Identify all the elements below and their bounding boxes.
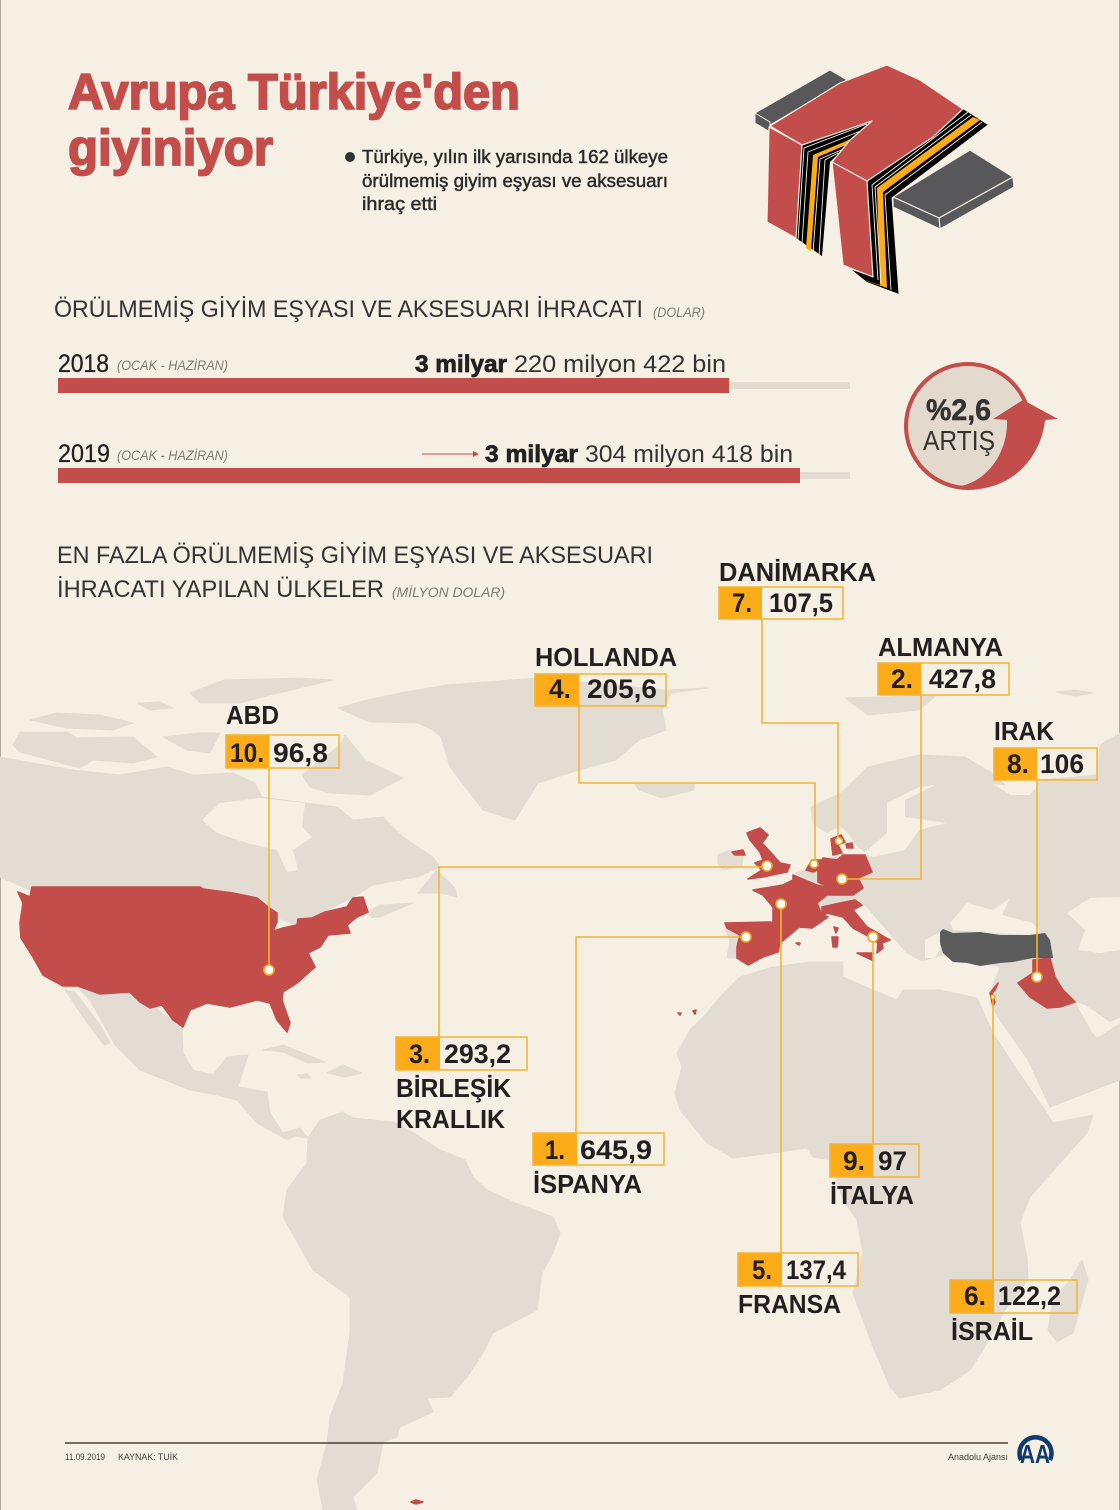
row 2019: (OCAK - HAZİRAN) (117, 447, 228, 463)
highlighted countries (18, 828, 1075, 1504)
country: Balearic (796, 943, 800, 945)
country: Netherlands (806, 860, 823, 872)
row 2019: 304 milyon 418 bin (585, 441, 793, 468)
label: ABD (226, 700, 339, 768)
row 2019: 3 milyar (485, 441, 578, 468)
label: Birleşik Krallık: BİRLEŞİK (396, 1073, 511, 1103)
source: KAYNAK: TUİK (118, 1452, 178, 1462)
label: İtalya: İTALYA (830, 1180, 914, 1210)
label: İsrail: 122,2 (998, 1281, 1061, 1311)
label: Danimarka: 7. (732, 588, 752, 618)
row 2018: 2018 (58, 350, 109, 378)
callout: increase (906, 364, 1058, 489)
country: Sardinia (832, 937, 838, 947)
row 2019 (58, 440, 850, 483)
row 2018: (OCAK - HAZİRAN) (117, 357, 228, 373)
garment folded stripes left (796, 121, 872, 256)
label: Birleşik Krallık: 3. (409, 1039, 430, 1069)
label: İtalya: 9. (843, 1146, 865, 1176)
lead text (345, 147, 668, 214)
country: France (753, 875, 829, 928)
back shelf (755, 70, 847, 132)
country: USA (18, 887, 368, 1032)
country: Germany (818, 855, 872, 895)
label: Hollanda: HOLLANDA (535, 642, 677, 672)
garment red top and drapes (767, 65, 963, 277)
title line 2: giyiniyor (68, 120, 273, 176)
seas over the land (202, 785, 1120, 1038)
label: ABD: 96,8 (273, 738, 328, 768)
row 2018 (58, 350, 850, 393)
icon: AA logo: AA (1020, 1439, 1050, 1469)
front shelf (893, 150, 1014, 229)
country: Spain (725, 922, 798, 965)
icon: draped garment on shelves (755, 65, 1014, 294)
heading line 1: EN FAZLA ÖRÜLMEMİŞ GİYİM EŞYASI VE AKSESUARI (57, 542, 653, 569)
country: Italy (822, 900, 890, 953)
label: İsrail (950, 1280, 1077, 1346)
country: Northern Ireland (732, 850, 745, 855)
world map (0, 678, 1120, 1510)
islands: Falkland (411, 1500, 423, 1504)
label: Almanya: 427,8 (929, 664, 996, 694)
label: İtalya: 97 (878, 1146, 907, 1176)
land masses (0, 678, 1120, 1510)
label: Birleşik Krallık: KRALLIK (396, 1104, 505, 1134)
islands: Canary (678, 1013, 681, 1015)
islands: Canary east (693, 1010, 696, 1014)
label: İtalya (830, 1144, 919, 1210)
country: Denmark (831, 835, 845, 855)
heading: countries (57, 542, 653, 603)
country: Corsica (834, 927, 838, 933)
lead line 3: ihraç etti (362, 194, 437, 214)
arrow (960, 400, 1058, 489)
bar chart: exports (58, 350, 850, 483)
label: İspanya (533, 1133, 664, 1199)
unit note: (DOLAR) (653, 304, 705, 320)
label: İspanya: 1. (545, 1135, 565, 1165)
footer (65, 1437, 1052, 1469)
heading line 2: İHRACATI YAPILAN ÜLKELER (57, 576, 384, 603)
label: Fransa: 137,4 (786, 1255, 846, 1285)
label: Almanya: 2. (891, 664, 913, 694)
title (68, 64, 520, 176)
label: Birleşik Krallık (396, 1037, 527, 1134)
label: Irak (994, 716, 1097, 780)
row 2019: 2019 (58, 440, 110, 468)
label: ABD: 10. (230, 738, 264, 768)
circle (906, 364, 1030, 488)
country: Danish islands (846, 843, 853, 848)
garment folded stripes right (852, 109, 988, 294)
country: Iraq (1018, 958, 1075, 1008)
label: Hollanda: 205,6 (587, 674, 657, 704)
row 2018: 3 milyar (415, 351, 507, 378)
unit note: (MİLYON DOLAR) (392, 584, 505, 600)
country: United Kingdom (747, 828, 790, 879)
country: Turkey (940, 929, 1053, 966)
label: Irak: 106 (1040, 749, 1084, 779)
country: Israel (990, 983, 998, 1006)
leader lines (269, 619, 1037, 1281)
label: Fransa (738, 1253, 858, 1319)
label: İspanya: 645,9 (580, 1135, 652, 1165)
label: İsrail: İSRAİL (951, 1316, 1033, 1346)
label: Fransa: 5. (752, 1255, 772, 1285)
word: ARTIŞ (923, 425, 995, 456)
label: İspanya: İSPANYA (533, 1169, 642, 1199)
lead line 1: Türkiye, yılın ilk yarısında 162 ülkeye (362, 147, 668, 167)
label: Hollanda (535, 642, 677, 706)
label: Almanya: ALMANYA (878, 632, 1003, 662)
label: Hollanda: 4. (549, 674, 571, 704)
label: Birleşik Krallık: 293,2 (444, 1039, 511, 1069)
title line 1: Avrupa Türkiye'den (68, 64, 520, 120)
lead line 2: örülmemiş giyim eşyası ve aksesuarı (362, 171, 668, 191)
heading: export (54, 296, 705, 323)
label: Fransa: FRANSA (738, 1289, 841, 1319)
label: Danimarka (719, 557, 876, 619)
location dots (264, 838, 1042, 999)
agency: Anadolu Ajansı (948, 1452, 1008, 1462)
label: Irak: 8. (1007, 749, 1029, 779)
bullet (345, 152, 355, 162)
label: Danimarka: DANİMARKA (719, 557, 876, 587)
label: İsrail: 6. (964, 1281, 986, 1311)
label: Irak: IRAK (994, 716, 1054, 746)
label: Danimarka: 107,5 (769, 588, 833, 618)
row 2018: 220 milyon 422 bin (514, 351, 726, 378)
label: Almanya (878, 632, 1009, 695)
country: Sicily (857, 953, 873, 960)
date: 11.09.2019 (65, 1452, 105, 1462)
heading text: ÖRÜLMEMİŞ GİYİM EŞYASI VE AKSESUARI İHRACATI (54, 296, 643, 323)
percent: %2,6 (926, 394, 991, 427)
label: ABD: ABD (226, 700, 279, 730)
